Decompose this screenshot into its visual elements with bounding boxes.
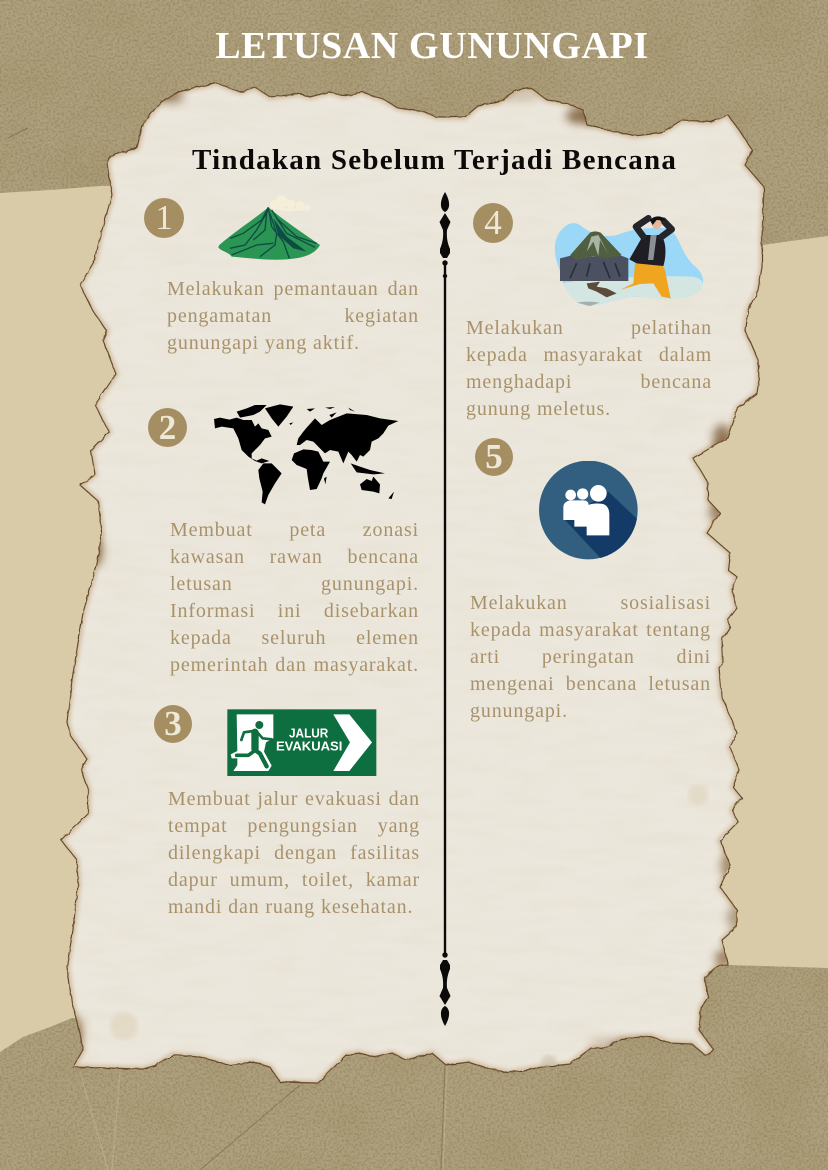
text 4: menghadapi bencana [466,371,712,393]
text 4 [466,317,712,420]
icon: green volcano [218,196,320,260]
text 2 [170,519,419,676]
text 3: Membuat jalur evakuasi dan [168,788,420,810]
badge 4 [473,203,513,243]
text 1: Melakukan pemantauan dan [167,278,419,300]
text 1: pengamatan kegiatan [167,305,419,327]
text 2: kawasan rawan bencana [170,546,419,568]
badge 2: 2 [159,408,176,447]
text 3: dilengkapi dengan fasilitas [168,842,420,864]
badge 3: 3 [164,704,182,743]
title: LETUSAN GUNUNGAPI [215,25,649,67]
icon: evacuation sign [227,709,376,776]
text 3: dapur umum, toilet, kamar [168,869,420,891]
text 2: Informasi ini disebarkan [170,600,419,622]
icon: person fleeing volcano [554,215,704,306]
text 3: mandi dan ruang kesehatan. [168,896,413,918]
text 1 [167,278,419,354]
text 2: kepada seluruh elemen [170,627,419,649]
text 5: arti peringatan dini [470,646,711,668]
badge 2 [148,408,187,447]
text 5: Melakukan sosialisasi [470,592,711,614]
heading: Tindakan Sebelum Terjadi Bencana [192,144,677,176]
text 4: kepada masyarakat dalam [466,344,712,366]
text 3: tempat pengungsian yang [168,815,420,837]
icon: evacuation sign: EVAKUASI [276,739,342,754]
badge 4: 4 [484,203,502,242]
text 5: mengenai bencana letusan [470,673,711,695]
text 2: pemerintah dan masyarakat. [170,654,419,676]
icon: evacuation sign: JALUR [289,725,329,740]
badge 3 [154,705,192,743]
badge 5 [475,438,513,476]
icon: world map [214,404,398,504]
badge 1 [144,198,184,238]
text 4: Melakukan pelatihan [466,317,712,339]
icon: group of people [539,461,638,560]
text 1: gunungapi yang aktif. [167,332,360,354]
text 2: letusan gunungapi. [170,573,419,595]
badge 1: 1 [155,198,173,237]
text 3 [168,788,420,918]
badge 5: 5 [485,437,503,476]
text 5 [470,592,711,722]
text 4: gunung meletus. [466,398,611,420]
center divider with ornaments [440,192,450,1026]
text 5: gunungapi. [470,700,568,722]
text 5: kepada masyarakat tentang [470,619,711,641]
text 2: Membuat peta zonasi [170,519,419,541]
